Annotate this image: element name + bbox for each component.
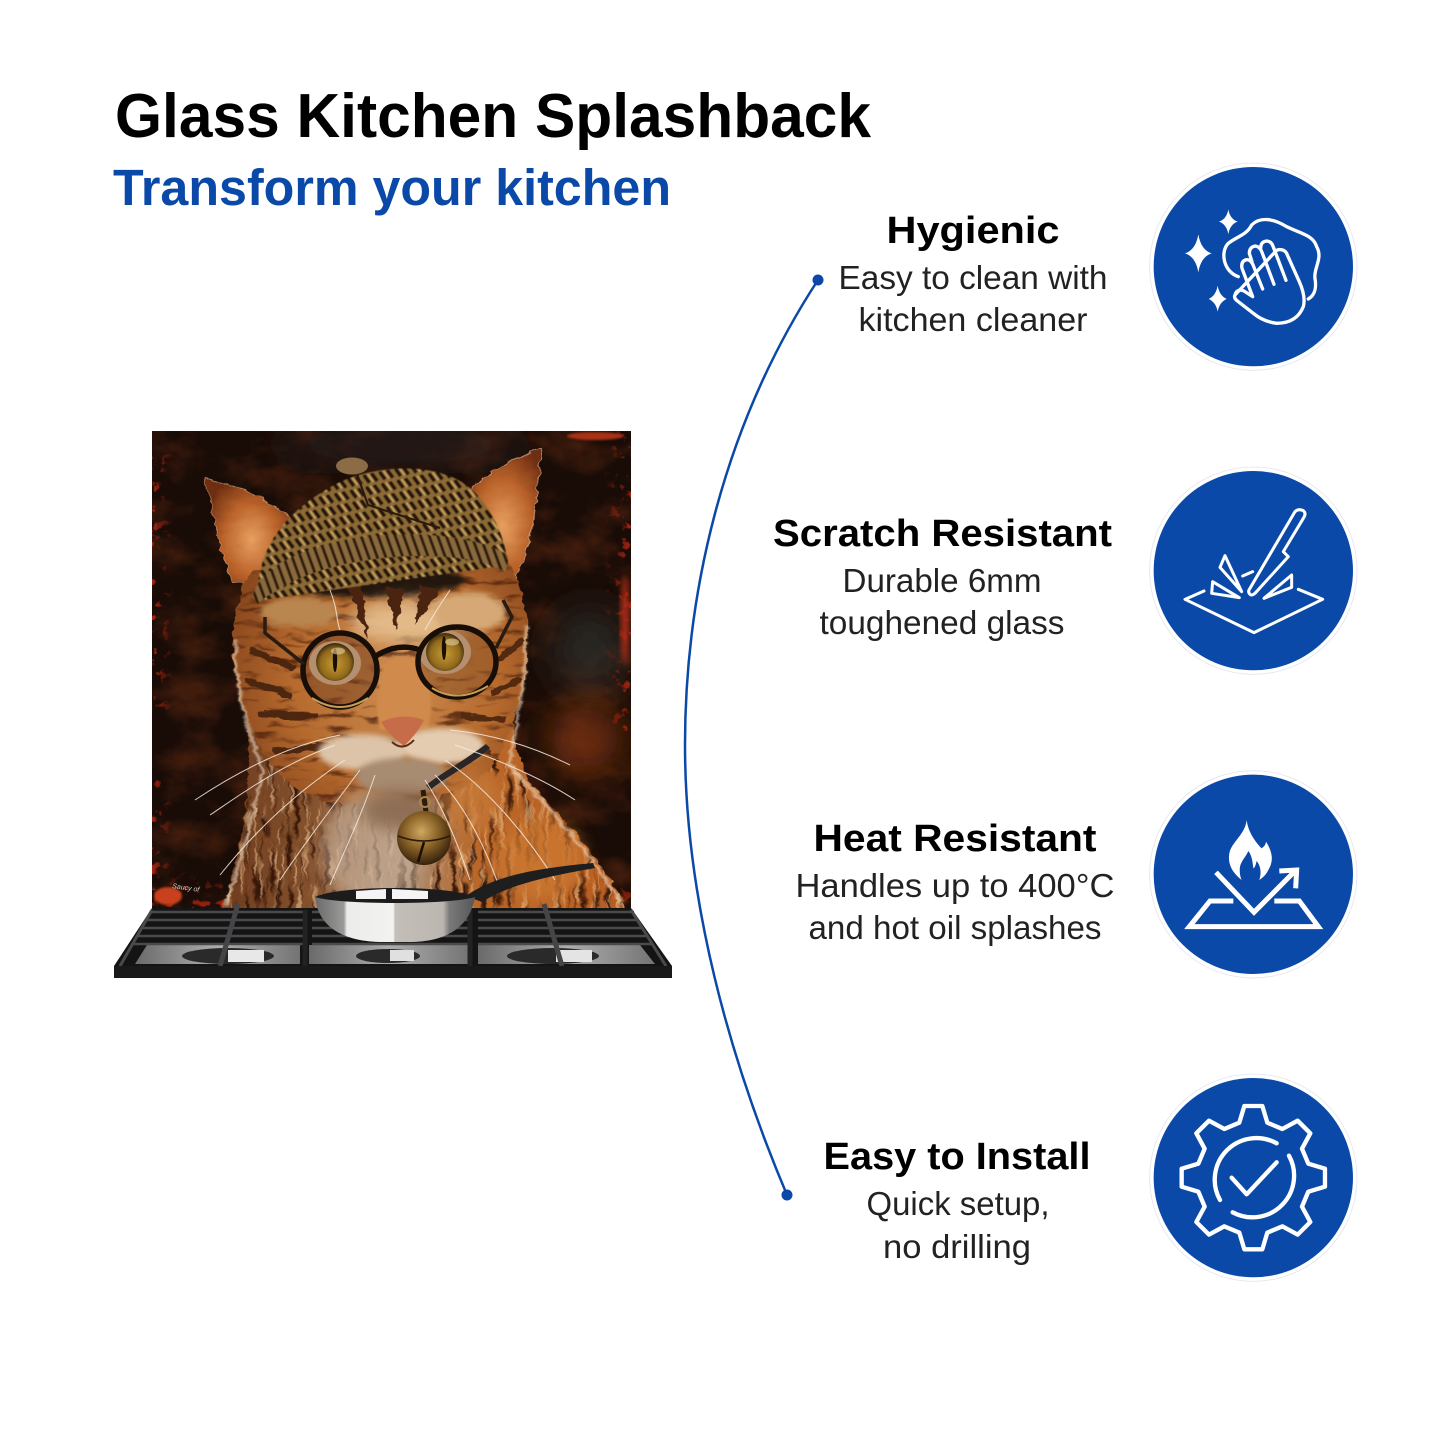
- description: hygienic: kitchen cleaner: [858, 301, 1088, 338]
- icon: wiping hand with sparkles: [1150, 163, 1357, 370]
- feature: heat resistant: [796, 771, 1357, 978]
- title: Glass Kitchen Splashback: [115, 82, 871, 151]
- body: [222, 700, 630, 915]
- heading: heat resistant: Heat Resistant: [814, 818, 1097, 860]
- artist signature: Saucy of: [172, 883, 201, 894]
- whiskers: [195, 590, 575, 890]
- icon: flame over surface with arrow: [1150, 771, 1357, 978]
- feature: scratch resistant: [773, 467, 1357, 674]
- right ear: [455, 448, 542, 590]
- collar and bell: [397, 744, 490, 865]
- head streak texture: [233, 560, 528, 806]
- face markings: [246, 562, 525, 752]
- pan handle: [466, 863, 595, 902]
- chest highlight: [322, 790, 422, 910]
- connecting curve with end dots: [685, 274, 824, 1200]
- heading: hygienic: Hygienic: [886, 210, 1060, 252]
- painted background: [152, 431, 631, 911]
- front edge: [114, 966, 672, 978]
- description: heat resistant: Handles up to 400°C: [796, 867, 1114, 904]
- frying pan: [315, 863, 595, 942]
- description: easy to install: [866, 1185, 1050, 1265]
- head: [233, 560, 528, 806]
- description: heat resistant: and hot oil splashes: [808, 909, 1102, 946]
- description: scratch resistant: [820, 562, 1064, 641]
- muzzle and nose bridge: [318, 657, 484, 830]
- gas hob: [114, 904, 672, 978]
- body streak texture: [222, 760, 630, 915]
- pale fur rim: [226, 625, 622, 905]
- description: heat resistant: [796, 867, 1114, 946]
- feature: hygienic: [838, 163, 1357, 370]
- heading: scratch resistant: Scratch Resistant: [773, 513, 1112, 555]
- subtitle: Transform your kitchen: [113, 159, 671, 216]
- description: easy to install: Quick setup,: [866, 1185, 1050, 1222]
- description: easy to install: no drilling: [883, 1228, 1031, 1265]
- splashback artwork: [152, 431, 631, 915]
- pan body: [315, 897, 475, 942]
- description: scratch resistant: Durable 6mm: [842, 562, 1042, 599]
- icon: knife on scratched surface: [1150, 467, 1357, 674]
- burners: [182, 948, 599, 964]
- glasses and eyes: [265, 600, 512, 707]
- icon: gear with check mark: [1150, 1074, 1357, 1281]
- product image: cat splashback above gas hob: [114, 431, 672, 978]
- feature: easy to install: [824, 1074, 1357, 1281]
- description: hygienic: Easy to clean with: [838, 259, 1108, 296]
- cap: [253, 458, 508, 604]
- heading: easy to install: Easy to Install: [824, 1136, 1090, 1178]
- left ear: [205, 478, 290, 590]
- cat fur: ears, head and body: [205, 448, 630, 915]
- grate bars: [120, 904, 666, 966]
- description: hygienic: [838, 259, 1108, 338]
- pan rim: [315, 888, 475, 903]
- rim glints: [356, 889, 428, 899]
- burner plates: [135, 945, 655, 964]
- shoulder highlight: [496, 820, 584, 900]
- hob body: [114, 908, 672, 966]
- description: scratch resistant: toughened glass: [820, 604, 1064, 641]
